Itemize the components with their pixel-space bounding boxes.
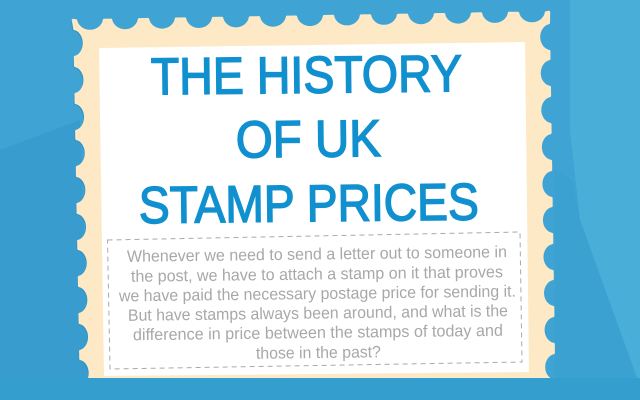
stamp white panel [99,42,529,376]
intro text: Whenever we need to send a letter out to someone in [127,243,507,266]
title: THE HISTORY [151,45,462,106]
stamp cream border [73,12,554,387]
intro text: difference in price between the stamps of today and [133,322,503,344]
intro text: those in the past? [256,343,381,363]
intro text: we have paid the necessary postage price for sending it. [118,283,516,305]
dashed intro box [108,232,522,369]
title: OF UK [236,110,381,170]
intro text [118,243,516,363]
title: STAMP PRICES [139,174,479,235]
bottom band [0,378,640,400]
intro text: But have stamps always been around, and what is the [128,302,508,325]
title [139,45,479,235]
stamp shadow [71,14,552,388]
intro text: the post, we have to attach a stamp on it that proves [131,263,503,286]
